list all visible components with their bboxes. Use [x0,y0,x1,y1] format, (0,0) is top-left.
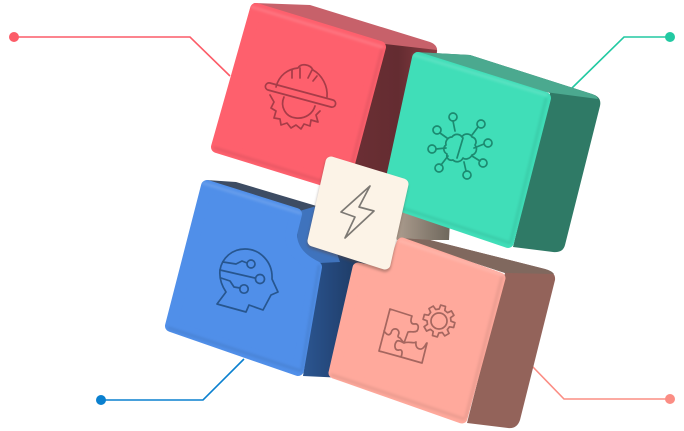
cube: blue [169,180,375,378]
connector: red [9,32,230,76]
icon: brain network [428,113,492,179]
connector: green [572,32,675,88]
cube: green [386,52,600,252]
cube: cream center [313,162,403,266]
icon: lightning bolt [341,186,374,238]
connector: blue [96,359,244,405]
icon: helmet and gear [265,65,336,129]
cube: peach [332,238,555,428]
connector: peach [532,366,675,404]
cube: red [215,3,437,210]
icon: puzzle and gear [379,302,458,363]
cast shadow between cubes [385,205,450,240]
icon: head with circuits [217,249,278,312]
